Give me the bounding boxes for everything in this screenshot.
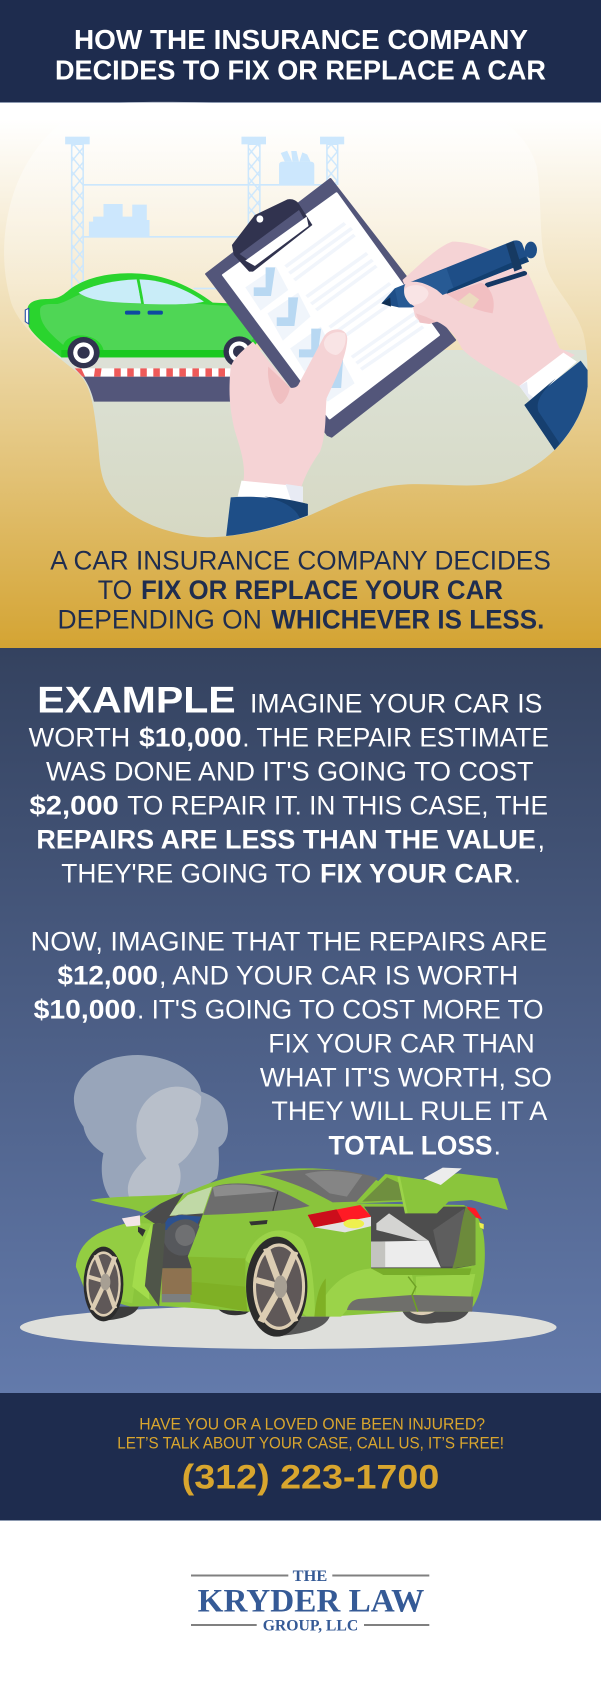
open front door: [145, 1223, 166, 1307]
example paragraph one: . THE REPAIR ESTIMATE: [242, 723, 549, 753]
rear door panel: [188, 1213, 271, 1258]
left hand: [226, 329, 347, 536]
footer call to action band: [0, 1393, 601, 1521]
example paragraph two: NOW, IMAGINE THAT THE REPAIRS ARE: [31, 926, 547, 956]
logo: The Kryder Law Group, LLC: KRYDER LAW: [198, 1583, 424, 1619]
example paragraph one: FIX YOUR CAR: [320, 858, 513, 888]
footer call to action band: (312) 223-1700: [182, 1458, 439, 1496]
logo: The Kryder Law Group, LLC: [191, 1568, 429, 1635]
footer call to action band: LET’S TALK ABOUT YOUR CASE, CALL US, IT’S FREE!: [117, 1434, 504, 1453]
backdrop blob: [0, 100, 601, 540]
interior and seats: [161, 1213, 203, 1268]
logo: The Kryder Law Group, LLC: GROUP, LLC: [263, 1618, 358, 1635]
ground shadow: [20, 1306, 557, 1349]
footer call to action band: HAVE YOU OR A LOVED ONE BEEN INJURED?: [139, 1414, 485, 1433]
example paragraph one: REPAIRS ARE LESS THAN THE VALUE: [36, 824, 536, 854]
example paragraph one: ,: [538, 824, 545, 854]
example paragraph two: [31, 926, 552, 1160]
illustration: inspector with clipboard and green car: [0, 100, 601, 540]
form lines: [286, 223, 423, 369]
front wheel: [84, 1247, 139, 1321]
green car: [25, 273, 261, 368]
example paragraph two: THEY WILL RULE IT A: [271, 1096, 547, 1126]
example paragraph two: TOTAL LOSS: [328, 1130, 492, 1160]
intro statement: [50, 545, 551, 635]
pen: [381, 240, 537, 307]
example paragraph two: WHAT IT'S WORTH, SO: [260, 1062, 552, 1092]
check boxes: [245, 267, 355, 402]
logo: The Kryder Law Group, LLC: THE: [293, 1568, 327, 1585]
intro statement: WHICHEVER IS LESS.: [271, 605, 544, 635]
intro statement: A CAR INSURANCE COMPANY DECIDES: [50, 545, 551, 575]
intro statement: TO: [98, 575, 132, 605]
side windows: [203, 1183, 310, 1215]
rear wheel: [246, 1237, 330, 1337]
panel: example background: [0, 648, 601, 1393]
illustration: wrecked green car with smoke: [20, 1055, 557, 1349]
right hand holding pen: [381, 240, 588, 450]
open trunk with crushed cargo: [364, 1207, 475, 1275]
example paragraph one: $2,000: [30, 790, 119, 820]
rear bumper: [347, 1277, 473, 1312]
intro statement: DEPENDING ON: [58, 605, 262, 635]
open hood: [90, 1193, 184, 1213]
example paragraph two: $10,000: [34, 994, 136, 1024]
far wheel: [218, 1309, 470, 1324]
example paragraph two: $12,000: [58, 960, 158, 990]
example paragraph two: . IT'S GOING TO COST MORE TO: [137, 994, 544, 1024]
example paragraph one: [29, 679, 549, 888]
example paragraph one: WORTH: [29, 723, 130, 753]
road with striped kerb: [61, 357, 236, 402]
tail lights: [308, 1205, 484, 1232]
panel: gold intro background: [0, 103, 601, 648]
example paragraph one: TO REPAIR IT. IN THIS CASE, THE: [127, 790, 548, 820]
intro statement: FIX OR REPLACE YOUR CAR: [141, 575, 503, 605]
example paragraph two: FIX YOUR CAR THAN: [268, 1028, 535, 1058]
header band with title: [0, 0, 601, 103]
example paragraph two: .: [494, 1130, 501, 1160]
example paragraph one: .: [514, 858, 521, 888]
example paragraph one: WAS DONE AND IT'S GOING TO COST: [46, 757, 534, 787]
car body: [76, 1168, 485, 1317]
example paragraph two: , AND YOUR CAR IS WORTH: [159, 960, 518, 990]
example paragraph one: EXAMPLE: [37, 679, 236, 720]
rear window glass: [260, 1170, 378, 1202]
headlight: [122, 1215, 140, 1227]
header band with title: HOW THE INSURANCE COMPANY: [74, 24, 528, 55]
garage shelving rack: [65, 137, 344, 289]
header band with title: DECIDES TO FIX OR REPLACE A CAR: [55, 54, 546, 85]
clipboard: [206, 179, 455, 437]
example paragraph one: THEY'RE GOING TO: [61, 858, 311, 888]
metal clip: [232, 199, 312, 272]
example paragraph one: IMAGINE YOUR CAR IS: [250, 688, 542, 718]
example paragraph one: $10,000: [139, 723, 242, 753]
smoke: [74, 1055, 228, 1203]
open trunk lid: [356, 1168, 508, 1213]
